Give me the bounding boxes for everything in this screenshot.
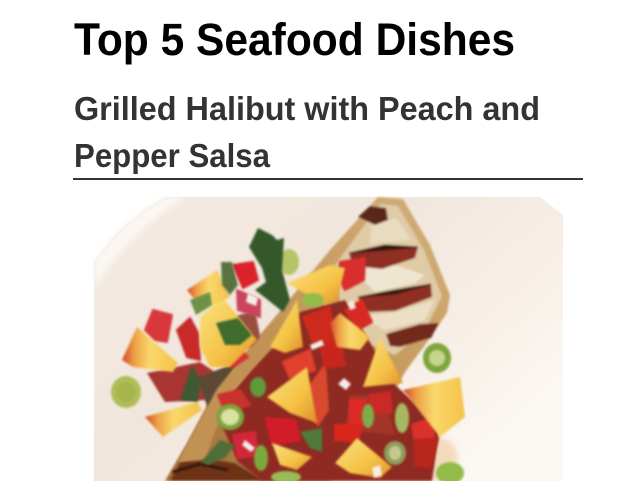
fish edge strip in front of the salsa base [178,325,280,462]
herb leaves [180,228,322,465]
sauce stain [395,435,458,481]
subtitle: Pepper Salsa [74,137,271,174]
salsa base [147,300,440,481]
subtitle [74,90,540,174]
photo: grilled halibut with peach and pepper salsa [94,197,563,481]
heading rule [73,178,583,180]
plate [94,197,563,481]
subtitle: Grilled Halibut with Peach and [74,90,540,127]
halibut fillet [165,197,450,481]
title: Top 5 Seafood Dishes [74,14,515,65]
green onion rings [111,249,464,481]
salsa flecks [242,293,382,478]
peach wedges [122,265,465,478]
grill marks [349,245,418,269]
peppers [145,258,438,468]
plate shading [94,197,185,290]
